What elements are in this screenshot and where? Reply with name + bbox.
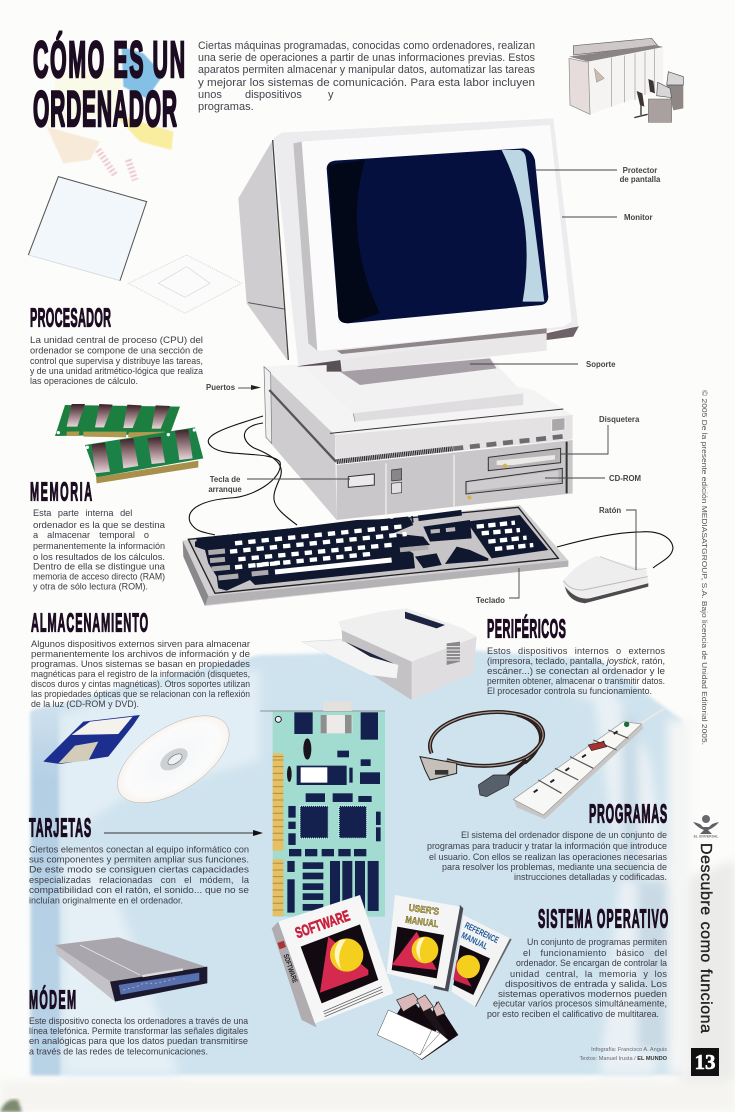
- monitor: [238, 118, 579, 372]
- heading: SISTEMA OPERATIVO: [538, 905, 668, 934]
- function keys: [418, 513, 462, 518]
- text block: permanentemente los archivos de información y de: [31, 649, 250, 659]
- icon: printer: [302, 608, 477, 700]
- text block: [31, 639, 250, 709]
- text block: sus componentes y permiten ampliar sus funciones.: [29, 854, 249, 864]
- intro text: dispositivos: [245, 89, 302, 101]
- text block: permanentemente la información: [33, 541, 165, 551]
- text block: El sistema del ordenador dispone de un conjunto de: [461, 830, 667, 840]
- text block: Este dispositivo conecta los ordenadores a través de una: [29, 1016, 249, 1026]
- text block: incluían originalmente en el ordenador.: [29, 896, 183, 906]
- label: tecla de arranque: Tecla de: [210, 475, 241, 484]
- label: tecla de arranque: [208, 475, 350, 494]
- panel: periféricos: [487, 614, 665, 696]
- icon: power strip: [513, 708, 665, 819]
- main keys: [195, 518, 430, 591]
- intro text: y: [328, 89, 334, 101]
- credits: Textos: Manuel Irusta / EL MUNDO: [579, 1056, 668, 1062]
- text block: [427, 830, 667, 882]
- text block: línea telefónica. Permite transformar las señales digitales: [29, 1026, 248, 1036]
- text block: especializadas relacionadas con el módem, la: [29, 875, 250, 885]
- user's manual: USER'S: [408, 903, 440, 918]
- nav keys: [415, 520, 488, 568]
- icon: cable: [420, 712, 543, 797]
- text block: La unidad central de proceso (CPU) del: [30, 335, 203, 345]
- text block: [29, 1016, 249, 1056]
- label: disquetera: Disquetera: [599, 415, 640, 424]
- monitor stand: [305, 347, 523, 422]
- text block: unidad central, la memoria y los: [510, 969, 667, 979]
- heading: TARJETAS: [29, 814, 91, 843]
- intro text: Ciertas máquinas programadas, conocidas como ordenadores, realizan: [198, 40, 535, 52]
- panel: procesador: [30, 304, 204, 386]
- text block: o los resultados de los cálculos.: [33, 552, 165, 562]
- side panel: [238, 142, 287, 360]
- series title vertical: Descubre como funciona: [697, 843, 714, 1033]
- title background illustration: [47, 47, 173, 180]
- text block: [487, 646, 665, 696]
- label: protector de pantalla: de pantalla: [620, 175, 661, 184]
- icon: publisher logo: EL UNIVERSAL: [694, 834, 718, 838]
- expansion card: [260, 702, 385, 917]
- intro text: aparatos permiten almacenar y manipular datos, automatizar las tareas: [198, 64, 535, 76]
- floppy stack: [377, 993, 458, 1060]
- blue background panel: [0, 650, 690, 1112]
- software box: SOFTWARE: [293, 908, 352, 942]
- panel: almacenamiento: [31, 609, 250, 709]
- arrow: [104, 830, 263, 836]
- label: monitor: Monitor: [624, 213, 653, 222]
- software box: [272, 895, 393, 1027]
- credits: [579, 1047, 668, 1062]
- icon: mainframe with operators: [569, 38, 683, 122]
- screen glare: [502, 150, 544, 302]
- text block: el funcionamiento básico del: [523, 948, 667, 958]
- text block: Algunos dispositivos externos sirven para almacenar: [31, 639, 250, 649]
- credits: Infografía: Francisco A. Anguis: [591, 1047, 667, 1053]
- heading: PERIFÉRICOS: [487, 614, 566, 644]
- text block: Esta parte interna del: [33, 508, 132, 518]
- screen: [327, 148, 548, 323]
- cd-rom drive: [466, 468, 562, 499]
- label: puertos: [206, 383, 261, 392]
- label: tecla de arranque: arranque: [208, 485, 242, 494]
- intro text: y mejorar los sistemas de comunicación. Para esta labor incluyen: [198, 77, 535, 89]
- neck: [342, 333, 547, 372]
- label: ratón: Ratón: [599, 506, 621, 515]
- text block: Ciertos elementos conectan al equipo informático con: [29, 844, 249, 854]
- component labels: [206, 166, 661, 605]
- reference manual: MANUAL: [460, 930, 490, 952]
- reference manual: [452, 915, 512, 1007]
- text block: Un conjunto de programas permiten: [527, 937, 667, 947]
- icon: processor: [28, 177, 242, 313]
- text block: (impresora, teclado, pantalla, joystick, ratón,: [487, 656, 665, 666]
- intro text: una serie de operaciones a partir de unas informaciones previas. Estos: [198, 52, 535, 64]
- text block: las operaciones de cálculo.: [30, 376, 138, 386]
- numeric keypad: [467, 515, 548, 558]
- label: protector de pantalla: [535, 166, 661, 184]
- text block: para resolver los problemas, mediante una secuencia de: [442, 862, 667, 872]
- computer base unit: [264, 360, 573, 520]
- label: cd-rom: CD-ROM: [609, 474, 641, 483]
- text block: sistemas operativos modernos pueden: [498, 989, 667, 999]
- intro text: programas.: [198, 101, 254, 113]
- icon: publisher logo: [693, 815, 719, 838]
- text block: memoria de acceso directo (RAM): [33, 572, 165, 582]
- text block: ordenador es la que se destina: [33, 520, 166, 530]
- power key: [348, 474, 374, 487]
- cables: [189, 416, 673, 568]
- bracket: [321, 702, 352, 733]
- text block: y de una unidad aritmético-lógica que realiza: [30, 366, 204, 376]
- text block: de la luz (CD-ROM y DVD).: [31, 699, 139, 709]
- intro text: unos: [198, 89, 222, 101]
- text block: [30, 335, 204, 386]
- text block: las propiedades ópticas que se relacionan con la reflexión: [31, 689, 250, 699]
- heading: MEMORIA: [30, 478, 92, 507]
- panel: tarjetas: [29, 814, 263, 906]
- heading: ALMACENAMIENTO: [31, 609, 148, 638]
- heading: PROCESADOR: [30, 304, 111, 333]
- text block: Estos dispositivos internos o externos: [487, 646, 665, 656]
- edge connector: [273, 753, 283, 916]
- panel: módem: [29, 984, 249, 1056]
- icon: cd: [103, 698, 244, 820]
- text block: ejecutar varios procesos simultáneamente,: [493, 998, 667, 1008]
- icon: floppy disk: [43, 715, 140, 764]
- label: puertos: Puertos: [206, 383, 236, 392]
- label: teclado: Teclado: [476, 596, 505, 605]
- text block: [33, 508, 166, 592]
- text block: De este modo se consiguen ciertas capacidades: [29, 864, 249, 874]
- panel: sistema operativo: [487, 905, 668, 1019]
- text block: compatibilidad con el ratón, el sonido... que no se: [29, 885, 249, 895]
- text block: el usuario. Con ellos se realizan las operaciones necesarias: [429, 852, 667, 862]
- software box: SOFTWARE: [281, 953, 300, 984]
- text block: ordenador. Se encargan de controlar la: [516, 958, 668, 968]
- text block: [29, 844, 250, 906]
- text block: a través de las redes de telecomunicaciones.: [29, 1046, 208, 1056]
- panel: memoria: [30, 478, 166, 592]
- text block: en analógicas para que los datos puedan transmitirse: [29, 1036, 248, 1046]
- text block: [487, 937, 668, 1019]
- user's manual: [387, 895, 463, 992]
- label: cd-rom: [545, 474, 641, 483]
- text block: instrucciones detalladas y codificadas.: [514, 872, 667, 882]
- text block: escáner...) se conectan al ordenador y le: [487, 666, 665, 676]
- mouse: [563, 556, 648, 603]
- text block: dispositivos de entrada y salida. Los: [505, 979, 667, 989]
- page number: 13: [694, 1050, 716, 1074]
- page number: [691, 1048, 719, 1076]
- icon: memory modules: [55, 404, 203, 483]
- title: CÓMO ES UN: [33, 31, 185, 89]
- text block: discos duros y cintas magnéticas). Otros soportes utilizan: [31, 679, 250, 689]
- label: protector de pantalla: Protector: [623, 166, 657, 175]
- text block: programas. Unos sistemas se basan en propiedades: [31, 659, 250, 669]
- copyright vertical text: © 2005 De la presente edición MEDIASATGROUP, S.A. Bajo licencia de Unidad Editorial 2005.: [700, 390, 709, 745]
- heading: MÓDEM: [29, 984, 76, 1015]
- bezel: [273, 118, 578, 366]
- floppy drive: [488, 448, 561, 471]
- text block: por esto reciben el calificativo de multitarea.: [487, 1009, 659, 1019]
- title: ORDENADOR: [33, 81, 177, 138]
- label: ratón: [599, 506, 636, 570]
- text block: a almacenar temporal o: [33, 530, 149, 540]
- label: monitor: [562, 213, 653, 222]
- keyboard: [183, 505, 568, 606]
- text block: y otra de sólo lectura (ROM).: [33, 582, 148, 592]
- small buttons: [392, 469, 402, 494]
- icon: modem: [55, 937, 207, 1002]
- text block: magnéticas para el registro de la información (disquetes,: [31, 669, 250, 679]
- intro text: [198, 40, 535, 113]
- label: soporte: Soporte: [586, 360, 616, 369]
- components: [287, 712, 381, 913]
- title: [33, 31, 185, 138]
- reference manual: REFERENCE: [463, 920, 500, 945]
- text block: ordenador se compone de una sección de: [30, 346, 203, 356]
- user's manual: MANUAL: [405, 915, 439, 930]
- label: disquetera: [560, 415, 640, 454]
- text block: permiten obtener, almacenar o transmitir datos.: [487, 676, 665, 686]
- text block: El procesador controla su funcionamiento.: [487, 686, 652, 696]
- text block: programas para traducir y tratar la información que introduce: [427, 841, 667, 851]
- text block: Dentro de ella se distingue una: [33, 562, 166, 572]
- label: teclado: [476, 568, 519, 605]
- panel: programas: [427, 800, 667, 882]
- heading: PROGRAMAS: [589, 800, 667, 829]
- text block: control que supervisa y distribuye las tareas,: [30, 356, 203, 366]
